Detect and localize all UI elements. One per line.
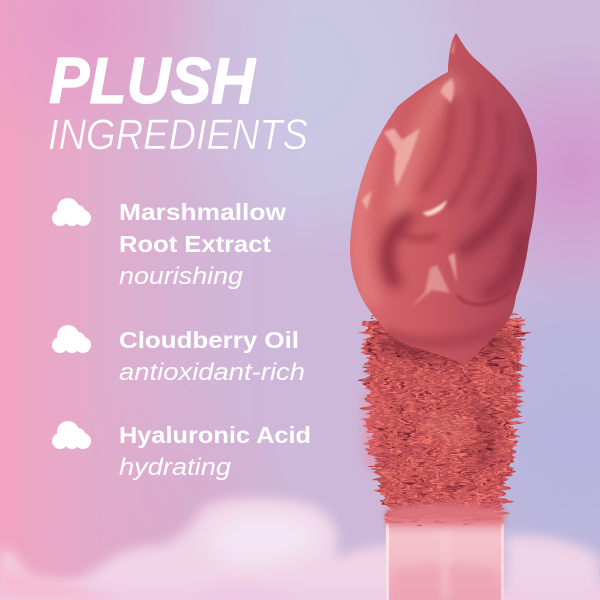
icon: cloud	[52, 325, 91, 353]
ingredient name: Cloudberry Oil	[119, 327, 299, 353]
blob gloss highlights	[362, 38, 457, 308]
ingredient benefit: nourishing	[119, 263, 244, 290]
icon: cloud	[52, 421, 91, 449]
product: plush lip applicator	[350, 33, 537, 600]
ingredient name: Marshmallow	[119, 199, 286, 225]
ingredient: Marshmallow Root Extract	[52, 198, 286, 290]
ingredient: Cloudberry Oil	[52, 325, 305, 386]
ingredient name, second line: Root Extract	[119, 231, 271, 257]
heading: INGREDIENTS: INGREDIENTS	[48, 111, 308, 159]
gloss cream blob	[350, 33, 537, 365]
ingredient: Hyaluronic Acid	[52, 421, 311, 481]
title	[48, 44, 308, 159]
ingredient name: Hyaluronic Acid	[119, 422, 311, 448]
fuzzy flocked tip	[355, 315, 533, 530]
applicator tube	[386, 512, 504, 600]
ingredient benefit: antioxidant-rich	[119, 359, 305, 386]
icon: cloud	[52, 198, 91, 226]
blob shading folds	[359, 85, 535, 343]
heading: PLUSH: PLUSH	[49, 44, 257, 117]
ingredient benefit: hydrating	[119, 454, 232, 481]
clouds along the bottom edge	[0, 498, 600, 600]
